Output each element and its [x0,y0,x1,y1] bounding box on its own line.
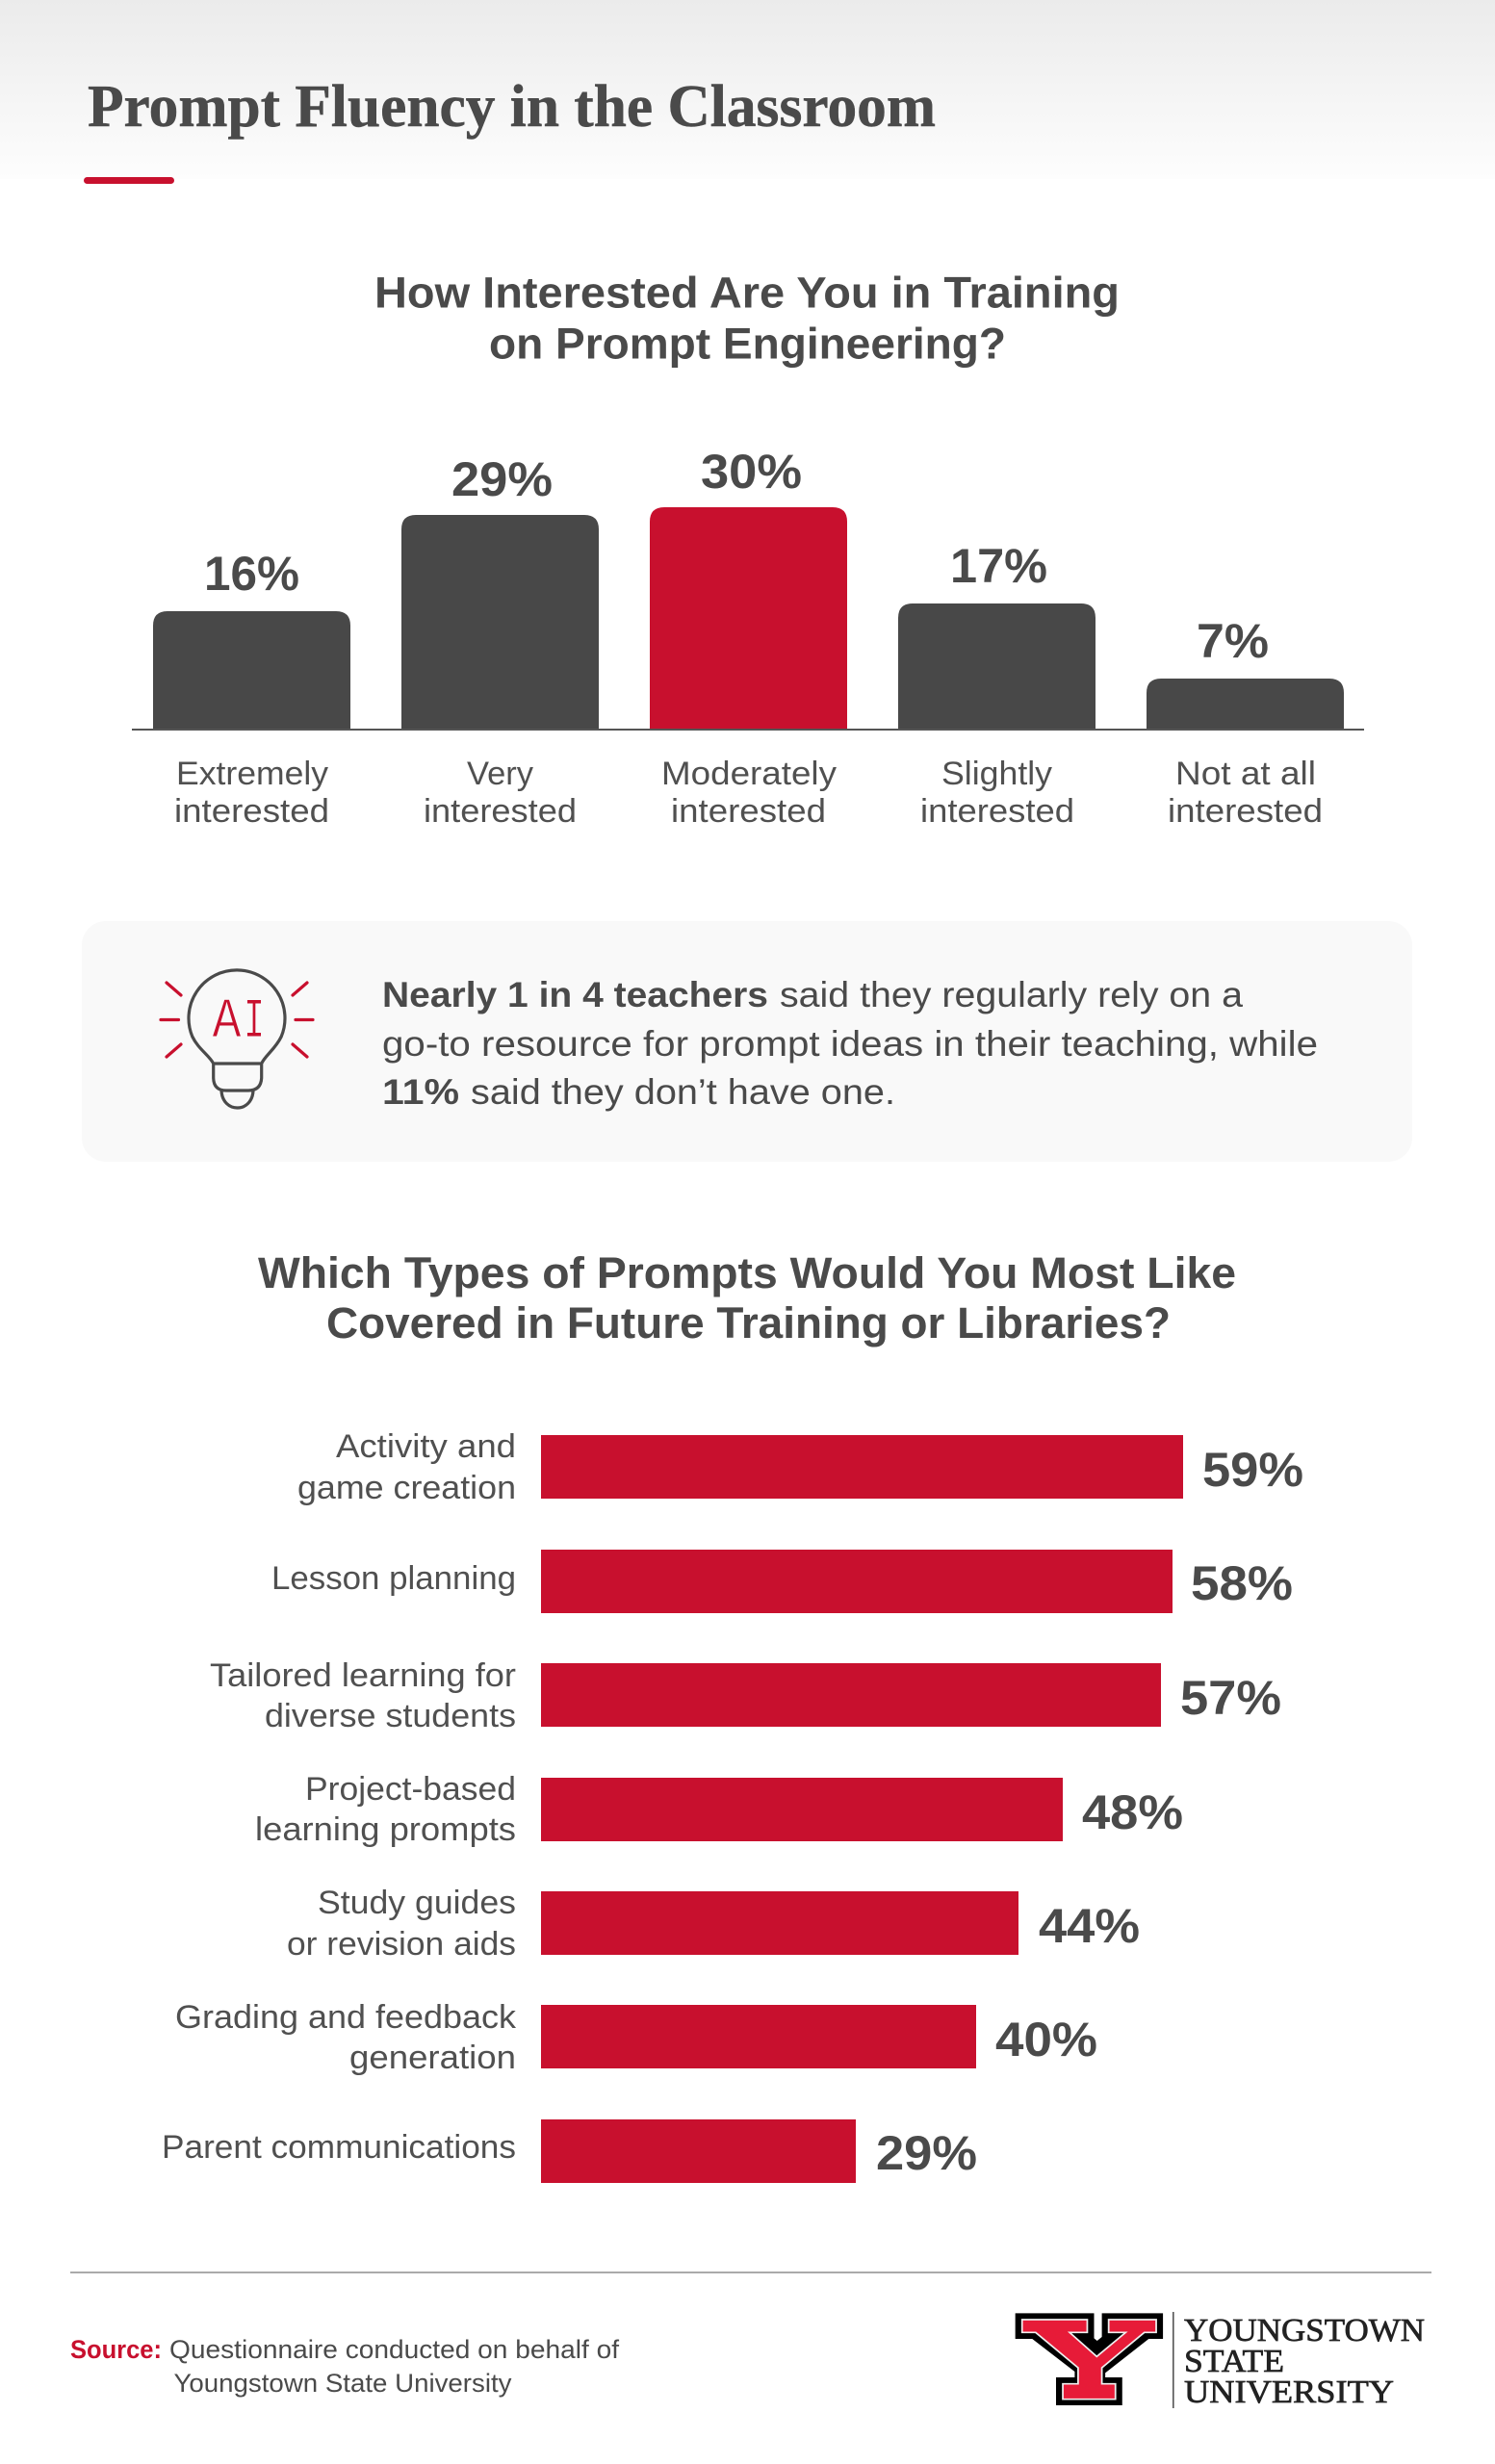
row: tailored learning 57%: diverse students [265,1698,516,1734]
column: moderately interested 30% [650,445,847,830]
row: study guides or revision aids 44%: or revision aids [287,1926,516,1963]
column: moderately interested 30%: interested [671,793,826,830]
row: activity and game creation 59%: Activity and [336,1428,516,1465]
icon: AI light bulb [161,970,313,1108]
row: project-based learning prompts 48%: learning prompts [255,1811,516,1848]
row: parent communications 29% [162,2119,977,2183]
row: lesson planning 58% [271,1550,1293,1613]
row: parent communications 29%: Parent communications [162,2129,516,2166]
column: moderately interested 30%: Moderately [661,756,837,792]
column: very interested 29%: Very [467,756,533,792]
column: very interested 29%: 29% [451,452,553,506]
heading: training interest [374,268,1120,368]
logo: Youngstown State University [1016,2312,1425,2410]
column: not at all interested 7%: Not at all [1175,756,1316,792]
column: extremely interested 16% [153,547,350,830]
column: not at all interested 7%: 7% [1197,614,1269,668]
panel: callout [82,921,1412,1162]
source note: Questionnaire conducted on behalf of [169,2335,620,2364]
row: grading and feedback generation 40%: 40% [995,2013,1097,2066]
row: tailored learning 57%: Tailored learning for [210,1657,516,1694]
column: slightly interested 17%: interested [920,793,1074,830]
callout text: Nearly 1 in 4 teachers [382,975,768,1014]
bar chart: prompt types [162,1428,1303,2183]
row: activity and game creation 59%: game creation [297,1470,516,1506]
title: Prompt Fluency in the Classroom [88,74,936,140]
column: slightly interested 17% [898,539,1095,830]
column: extremely interested 16%: 16% [204,547,299,601]
column: not at all interested 7% [1147,614,1344,830]
row: parent communications 29%: 29% [876,2126,977,2180]
row: grading and feedback generation 40%: Grading and feedback [175,1999,517,2036]
row: tailored learning 57%: 57% [1180,1671,1281,1725]
column: not at all interested 7%: interested [1168,793,1323,830]
row: lesson planning 58%: Lesson planning [271,1560,516,1597]
source note [70,2335,620,2398]
column chart: interest in prompt engineering training [132,445,1364,830]
row: activity and game creation 59% [297,1428,1303,1506]
icon: AI light bulb: A [212,991,242,1054]
icon: AI light bulb: I [244,991,265,1054]
callout text: said they don’t have one. [471,1072,895,1112]
column: very interested 29% [401,452,599,830]
column: slightly interested 17%: Slightly [941,756,1052,792]
row: project-based learning prompts 48% [255,1771,1183,1848]
source note: Youngstown State University [173,2369,512,2398]
row: grading and feedback generation 40% [175,1999,1097,2076]
title accent rule [84,177,174,184]
row: activity and game creation 59%: 59% [1202,1443,1303,1497]
row: project-based learning prompts 48%: Project-based [305,1771,516,1808]
column: very interested 29%: interested [424,793,577,830]
row: study guides or revision aids 44%: Study guides [318,1885,516,1921]
logo wordmark [1184,2313,1425,2410]
heading: training interest: on Prompt Engineering? [489,320,1006,368]
logo mark: block Y [1016,2313,1163,2405]
heading: prompt types: Covered in Future Training or Libraries? [326,1298,1171,1348]
row: study guides or revision aids 44%: 44% [1039,1899,1140,1953]
callout text [382,975,1318,1112]
logo wordmark: STATE [1184,2344,1284,2379]
heading: training interest: How Interested Are You in Training [374,268,1120,318]
logo wordmark: YOUNGSTOWN [1184,2313,1425,2348]
column: extremely interested 16%: Extremely [176,756,328,792]
row: lesson planning 58%: 58% [1191,1556,1293,1610]
source note: Source: [70,2335,162,2364]
logo wordmark: UNIVERSITY [1184,2374,1394,2410]
row: tailored learning 57% [210,1657,1281,1734]
callout text: 11% [382,1072,459,1112]
column: extremely interested 16%: interested [174,793,329,830]
column: slightly interested 17%: 17% [950,539,1047,593]
callout text: go-to resource for prompt ideas in their teaching, while [382,1024,1318,1064]
row: project-based learning prompts 48%: 48% [1082,1785,1183,1839]
column: moderately interested 30%: 30% [701,445,802,499]
heading: prompt types [258,1248,1236,1348]
callout text: said they regularly rely on a [780,975,1243,1014]
row: study guides or revision aids 44% [287,1885,1140,1963]
heading: prompt types: Which Types of Prompts Would You Most Like [258,1248,1236,1297]
row: grading and feedback generation 40%: generation [349,2040,516,2076]
